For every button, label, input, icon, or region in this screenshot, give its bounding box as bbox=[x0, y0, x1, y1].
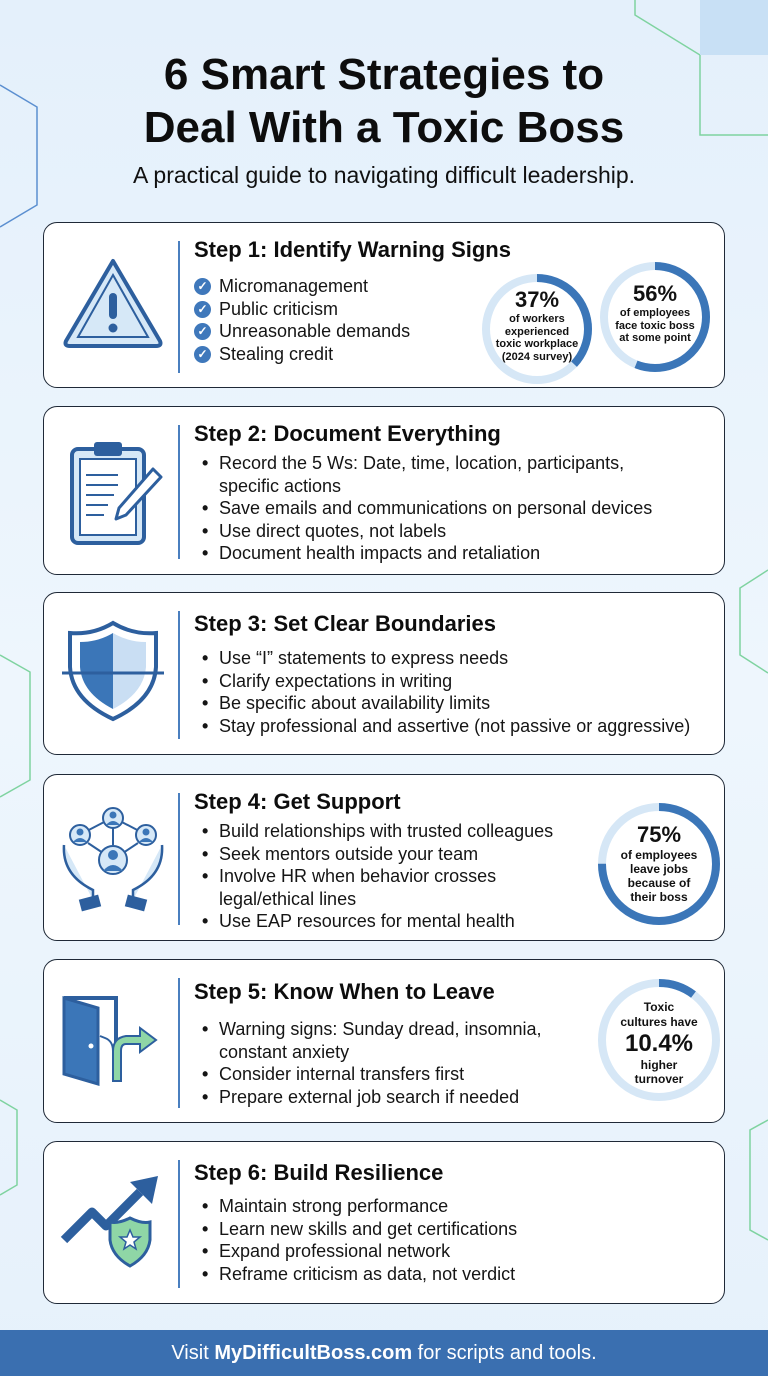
heading: Step 1: Identify Warning Signs bbox=[194, 237, 511, 262]
ring stat 75%: because of bbox=[628, 876, 690, 890]
ring stat 10.4%: cultures have bbox=[620, 1015, 698, 1029]
subtitle: A practical guide to navigating difficult leadership. bbox=[133, 162, 635, 188]
bullet list: Record the 5 Ws: Date, time, location, participants, bbox=[219, 453, 624, 473]
checklist: Public criticism bbox=[219, 298, 338, 318]
panel: step 5 bbox=[43, 959, 725, 1123]
icon: shield bbox=[62, 620, 164, 722]
bullet list: Use direct quotes, not labels bbox=[219, 520, 446, 540]
bullet list: Seek mentors outside your team bbox=[219, 844, 478, 864]
ring stat 10.4%: higher bbox=[641, 1058, 677, 1072]
bullet list: Save emails and communications on personal devices bbox=[219, 498, 652, 518]
panel: step 1 bbox=[43, 222, 725, 388]
ring stat 37%: (2024 survey) bbox=[502, 350, 572, 362]
ring stat 37%: 37% bbox=[515, 287, 559, 312]
ring stat 75%: leave jobs bbox=[630, 862, 688, 876]
bullet list: legal/ethical lines bbox=[219, 888, 356, 908]
footer bbox=[0, 1330, 768, 1376]
bullet list bbox=[202, 1196, 517, 1284]
ring stat 37% bbox=[482, 274, 592, 384]
panel: step 6 bbox=[43, 1141, 725, 1304]
bullet list: constant anxiety bbox=[219, 1042, 349, 1062]
ring stat 10.4% bbox=[598, 979, 720, 1101]
bullet list bbox=[202, 821, 553, 931]
ring stat 56% bbox=[600, 262, 710, 372]
bullet list: Clarify expectations in writing bbox=[219, 670, 452, 690]
checklist: Stealing credit bbox=[219, 344, 333, 364]
bullet list: Maintain strong performance bbox=[219, 1196, 448, 1216]
ring stat 56%: at some point bbox=[619, 332, 691, 344]
ring stat 75%: of employees bbox=[621, 848, 697, 862]
bullet list: Expand professional network bbox=[219, 1241, 450, 1261]
title: Deal With a Toxic Boss bbox=[144, 103, 624, 152]
bullet list: Warning signs: Sunday dread, insomnia, bbox=[219, 1019, 542, 1039]
icon: growth arrow shield bbox=[60, 1176, 158, 1268]
icon: support network hands bbox=[62, 807, 164, 912]
ring stat 37%: experienced bbox=[505, 326, 569, 338]
ring stat 37%: toxic workplace bbox=[496, 338, 578, 350]
ring stat 10.4%: 10.4% bbox=[625, 1030, 693, 1057]
heading: Step 5: Know When to Leave bbox=[194, 979, 495, 1004]
ring stat 56%: of employees bbox=[620, 307, 690, 319]
ring stat 75%: 75% bbox=[637, 822, 681, 847]
bullet list: Prepare external job search if needed bbox=[219, 1086, 519, 1106]
bullet list: Involve HR when behavior crosses bbox=[219, 866, 496, 886]
checklist: Unreasonable demands bbox=[219, 321, 410, 341]
title: 6 Smart Strategies to bbox=[164, 50, 604, 99]
icon: clipboard bbox=[70, 442, 163, 545]
bullet list bbox=[202, 648, 690, 736]
panel: step 2 bbox=[43, 406, 725, 575]
bullet list: Be specific about availability limits bbox=[219, 693, 490, 713]
panel: step 4 bbox=[43, 774, 725, 941]
heading: Step 4: Get Support bbox=[194, 789, 401, 814]
checklist: Micromanagement bbox=[219, 276, 368, 296]
bullet list: Document health impacts and retaliation bbox=[219, 543, 540, 563]
ring stat 10.4%: Toxic bbox=[644, 1000, 674, 1014]
bullet list: Consider internal transfers first bbox=[219, 1064, 464, 1084]
ring stat 56%: 56% bbox=[633, 281, 677, 306]
icon: door with arrow bbox=[62, 996, 158, 1086]
bullet list: Learn new skills and get certifications bbox=[219, 1218, 517, 1238]
bullet list: Stay professional and assertive (not passive or aggressive) bbox=[219, 716, 690, 736]
icon: warning triangle bbox=[64, 258, 162, 348]
ring stat 56%: face toxic boss bbox=[615, 320, 695, 332]
ring stat 10.4%: turnover bbox=[635, 1072, 683, 1086]
ring stat 37%: of workers bbox=[509, 313, 565, 325]
heading: Step 2: Document Everything bbox=[194, 421, 501, 446]
ring stat 75%: their boss bbox=[630, 890, 688, 904]
footer: Visit MyDifficultBoss.com for scripts and tools. bbox=[171, 1342, 597, 1364]
panel: step 3 bbox=[43, 592, 725, 755]
bullet list bbox=[202, 453, 652, 563]
bullet list: Use EAP resources for mental health bbox=[219, 911, 515, 931]
checklist bbox=[194, 276, 410, 364]
bullet list: Use “I” statements to express needs bbox=[219, 648, 508, 668]
bullet list: Build relationships with trusted colleagues bbox=[219, 821, 553, 841]
bullet list bbox=[202, 1019, 542, 1107]
ring stat 75% bbox=[598, 803, 720, 925]
heading: Step 6: Build Resilience bbox=[194, 1160, 443, 1185]
bullet list: specific actions bbox=[219, 476, 341, 496]
bullet list: Reframe criticism as data, not verdict bbox=[219, 1264, 515, 1284]
heading: Step 3: Set Clear Boundaries bbox=[194, 611, 496, 636]
title bbox=[144, 50, 624, 152]
